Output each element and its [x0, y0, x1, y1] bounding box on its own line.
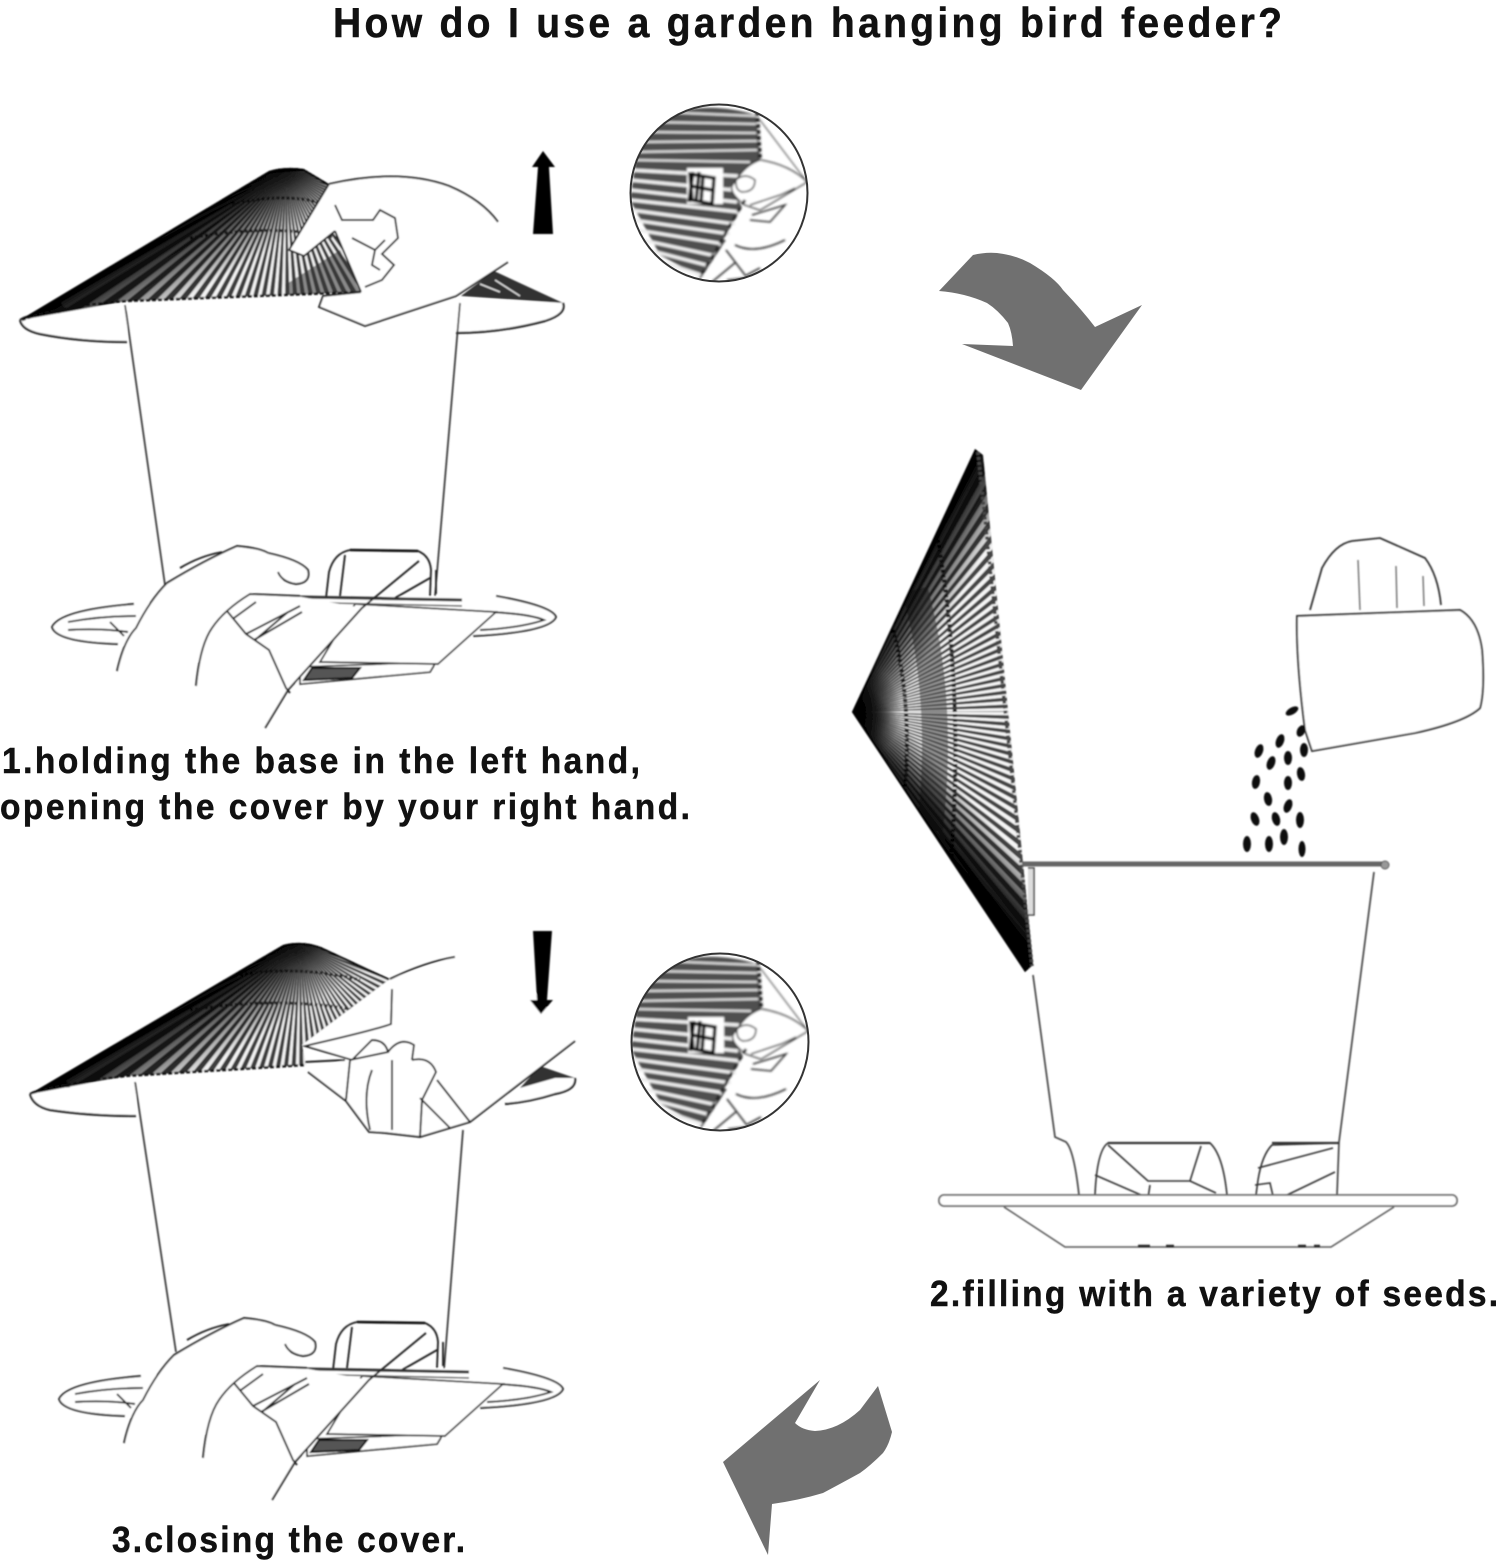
curved arrow: to step 2: [939, 253, 1142, 390]
down arrow: [530, 931, 553, 1014]
feeder body: [125, 303, 460, 596]
panel: step 2 filling with seeds: [851, 448, 1486, 1249]
hand: right hand opening cover: [289, 176, 520, 326]
feeder cover rim: [20, 298, 564, 342]
cover rim: [30, 1066, 575, 1116]
title: How do I use a garden hanging bird feeder?: [333, 0, 1282, 46]
panel: step 3 closing the cover: [28, 930, 578, 1502]
body: [1033, 872, 1374, 1195]
open cover cone: [851, 448, 1034, 973]
feeder base and left hand: [59, 1318, 563, 1502]
panel: step 1 opening the cover: [18, 150, 566, 730]
hand: closing cover: [302, 957, 575, 1137]
feeder cover cone: [24, 166, 360, 320]
scoop: [1297, 610, 1483, 751]
caption: step 1: opening the cover by your right hand.: [0, 788, 690, 827]
up arrow: [532, 151, 555, 234]
tray: [1004, 1207, 1394, 1247]
caption: step 3: 3.closing the cover.: [112, 1521, 465, 1560]
inset outline (bottom): [632, 954, 808, 1130]
feeding ports: [1095, 1143, 1339, 1198]
seeds: [1243, 704, 1308, 857]
feeder base and left hand: [52, 546, 556, 730]
curved arrow: to step 3: [723, 1380, 892, 1555]
caption: step 1: [0, 742, 690, 827]
cover cone: [34, 942, 390, 1094]
rim bar: [1022, 862, 1384, 866]
inset: close-up of latch (bottom): [631, 957, 808, 1131]
inset outline (top): [630, 104, 808, 282]
caption: step 1: 1.holding the base in the left hand,: [2, 742, 640, 781]
inset: close-up of latch (top): [630, 108, 807, 282]
plate: [939, 1195, 1457, 1206]
caption: step 2: 2.filling with a variety of seeds.: [930, 1275, 1498, 1314]
hand holding cup: [1310, 538, 1441, 610]
body: [135, 1082, 463, 1370]
